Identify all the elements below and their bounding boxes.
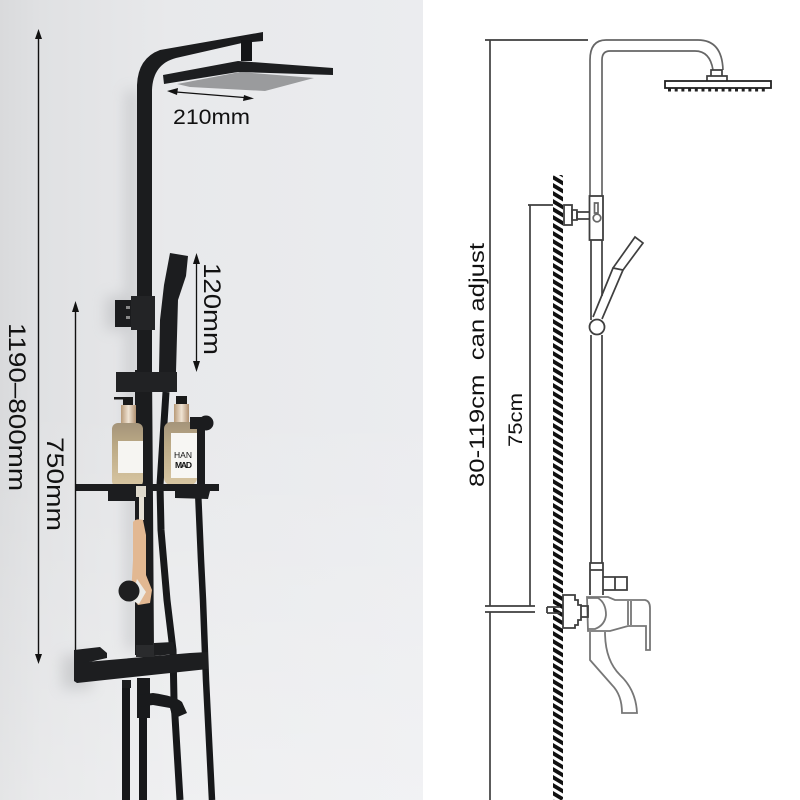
label: 75cm: 75cm [506,393,527,447]
arrow: head width [167,88,254,101]
icon: bottle right: MAD [175,460,192,470]
icon: thermostatic mixer [74,642,208,688]
dimension lines [485,40,588,800]
icon: shelf [76,484,219,501]
arrow: total height [35,29,42,664]
drawing: upper wall mount [564,196,603,240]
icon: tub spout [137,678,187,719]
label: 120mm: 120mm [198,263,225,355]
panel: technical drawing [466,40,771,800]
icon: riser pipe and arm [135,32,263,655]
icon: hoses [126,392,212,800]
drawing: hand shower [590,237,643,334]
label: overall adjustable height: 80-119cm can adjust [466,243,489,487]
icon: slide holder [116,372,177,392]
drawing: lower riser [591,240,602,563]
icon: bottle left [112,397,143,487]
arrow: height to bracket [72,301,79,650]
icon: hand shower [159,253,188,372]
label: 750mm: 750mm [41,437,68,531]
soft wall shadows [62,90,138,689]
panel: product photo [0,0,423,800]
icon: bath brush [118,486,152,605]
icon: wall bracket [115,296,155,330]
icon: bottle right: HAN [174,450,192,460]
label: 210mm: 210mm [173,106,250,129]
wall section [553,175,563,800]
drawing: shower head [665,70,771,90]
icon: rain shower head [163,40,333,91]
icon: hand spray holder [190,416,214,486]
arrow: hand shower length [193,253,200,372]
label: total height: 1190–800mm [3,323,30,491]
drawing: riser and overhead arm [590,40,723,196]
drawing: mixer and spout [547,563,650,713]
icon: bottle right [164,396,197,485]
